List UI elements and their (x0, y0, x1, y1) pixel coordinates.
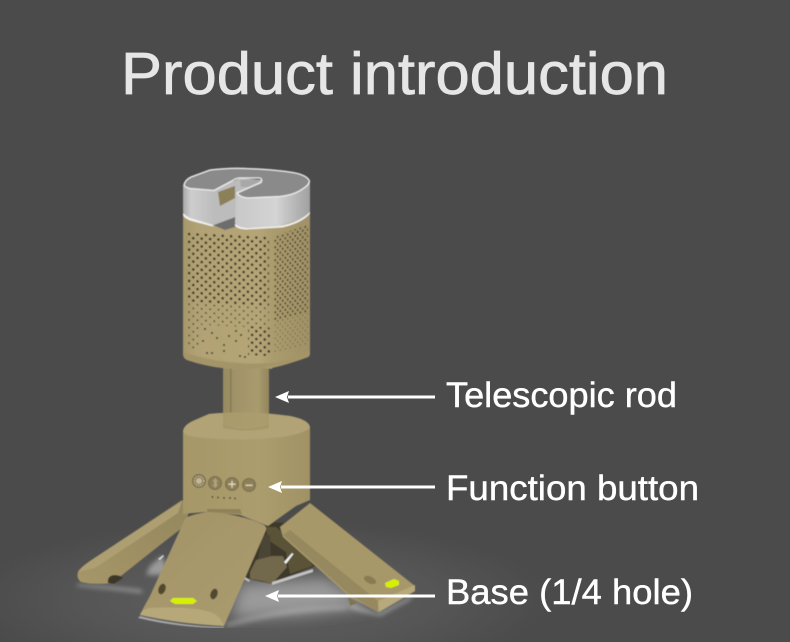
cap left block (183, 185, 214, 225)
arrow: function button (268, 481, 435, 493)
glow under the base (77, 556, 413, 628)
base housing (183, 412, 310, 526)
speaker body (183, 210, 310, 369)
function buttons (192, 474, 256, 492)
perforated dots (186, 232, 269, 306)
label: function button: Function button (446, 469, 699, 508)
front leg (140, 512, 266, 626)
front leg holes (157, 583, 167, 595)
left leg (77, 500, 190, 584)
battery indicator dots (212, 496, 236, 499)
left leg hole (108, 575, 123, 584)
cap right block (235, 182, 310, 228)
arrow: base (265, 590, 435, 602)
right leg hole (363, 574, 377, 586)
front indicator light (170, 598, 197, 604)
bluetooth button (208, 476, 222, 490)
title: Product introduction (121, 41, 668, 107)
product: tripod lantern speaker (77, 168, 415, 628)
right leg (280, 503, 415, 612)
plus button (226, 478, 238, 490)
cap dark inner (213, 213, 245, 230)
cap lower rim (183, 212, 310, 230)
floor glow (0, 520, 550, 642)
label: telescopic rod: Telescopic rod (446, 376, 677, 415)
cap top surface with bright rim (184, 168, 310, 198)
slot interior highlight (240, 180, 259, 187)
telescopic rod (223, 368, 269, 428)
minus button (242, 478, 256, 492)
right indicator light (385, 579, 399, 588)
underside mechanism (158, 522, 316, 585)
arrow: telescopic rod (275, 391, 435, 403)
slot wall (214, 178, 262, 225)
silver lamp cap (183, 168, 310, 230)
light button (192, 474, 206, 488)
label: base (1/4 hole): Base (1/4 hole) (446, 573, 693, 612)
